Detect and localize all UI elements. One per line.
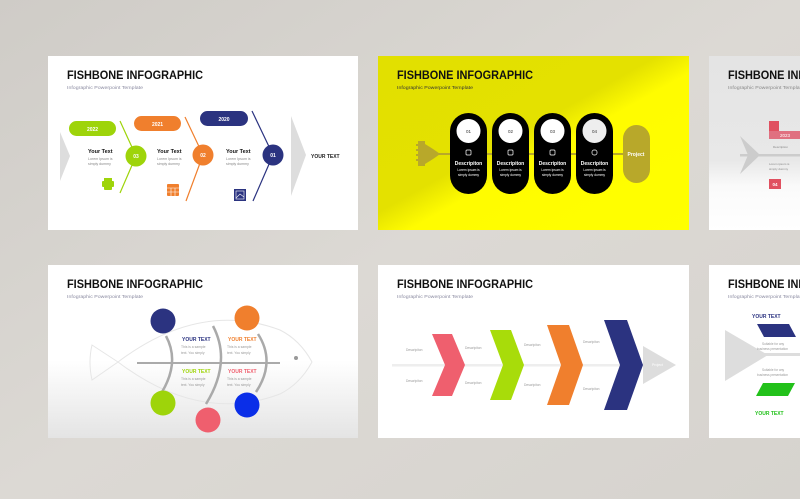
chevron navy (604, 320, 643, 410)
text navy (181, 337, 211, 355)
pill: project: Project (628, 152, 645, 158)
panel: slide 1 timeline fishbone (48, 56, 358, 230)
pill 02 (492, 113, 529, 194)
text block 2: simply dummy (157, 162, 180, 166)
descriptions: Descripiton (524, 343, 541, 347)
subtitle: Infographic Powerpoint Template (397, 85, 474, 90)
text block 3: simply dummy (226, 162, 249, 166)
arrow: left tail (60, 132, 70, 181)
text orange: This is a sample (227, 345, 252, 349)
item navy: Suitable for any (762, 342, 785, 346)
circle orange (234, 306, 260, 330)
chevron pink (432, 334, 465, 396)
panel: slide 2 yellow pills (378, 56, 689, 230)
bone orange (185, 117, 214, 201)
label: your text: YOUR TEXT (311, 154, 340, 160)
text navy: This is a sample (181, 345, 206, 349)
title: FISHBONE INFOGRAPHIC (67, 277, 203, 291)
text red: YOUR TEXT (228, 369, 257, 375)
pill 03: 03 (550, 129, 555, 134)
fish outline (90, 320, 312, 404)
text navy: YOUR TEXT (182, 337, 211, 343)
panel: slide 3 partial (709, 56, 800, 230)
subtitle: Infographic Powerpoint Template (397, 294, 474, 299)
bone green: 03 (133, 154, 139, 160)
pill 03: Lorem ipsum is (541, 168, 564, 172)
pill 03 (534, 113, 571, 194)
pill 01 (450, 113, 487, 194)
pill 01: simply dummy (458, 173, 479, 177)
text block 1: Your Text (88, 149, 113, 155)
item green (755, 368, 795, 417)
item green: YOUR TEXT (755, 411, 784, 417)
icon: printer (102, 178, 114, 190)
subtitle: Infographic Powerpoint Template (728, 294, 800, 299)
descriptions: Descripiton (406, 379, 423, 383)
pill 04: 04 (592, 129, 597, 134)
pill 03: Descripiton (539, 161, 566, 167)
pill 2021 (134, 116, 181, 131)
text block 2 (157, 149, 182, 166)
text block 3: Lorem Ipsum is (226, 157, 251, 161)
descriptions: Descripiton (465, 381, 482, 385)
item 04: 04 (772, 182, 778, 187)
spine: Project (652, 363, 663, 367)
bone navy (252, 111, 284, 201)
title: FISHBONE INFOGRAPHIC (397, 277, 533, 291)
descriptions: Descripiton (524, 383, 541, 387)
pill 2022 (69, 121, 116, 136)
pill 01: Lorem ipsum is (457, 168, 480, 172)
pill 02: Descripiton (497, 161, 524, 167)
circle red (196, 408, 220, 432)
text red: This is a sample (227, 377, 252, 381)
text orange: YOUR TEXT (228, 337, 257, 343)
text red: text. You simply (227, 383, 251, 387)
pill 02: 02 (508, 129, 513, 134)
item green: business presentation (757, 373, 788, 377)
pill 04: Lorem ipsum is (583, 168, 606, 172)
item 2023: Description (773, 145, 788, 149)
pill 2021: 2021 (152, 122, 163, 128)
text green: YOUR TEXT (182, 369, 211, 375)
descriptions: Descripiton (583, 340, 600, 344)
pill 04: simply dummy (584, 173, 605, 177)
text block 1 (88, 149, 113, 166)
text orange: text. You simply (227, 351, 251, 355)
text green: This is a sample (181, 377, 206, 381)
subtitle: Infographic Powerpoint Template (728, 85, 800, 90)
pill 01: 01 (466, 129, 471, 134)
item 04 (769, 162, 790, 189)
circle green (150, 390, 176, 416)
chevron orange (547, 325, 583, 405)
pill 02: simply dummy (500, 173, 521, 177)
text red (227, 369, 257, 387)
arrow: big head (291, 116, 306, 196)
pill 2020 (200, 111, 248, 126)
item 2023: 2023 (780, 133, 791, 138)
text block 1: Lorem Ipsum is (88, 157, 113, 161)
item navy: YOUR TEXT (752, 314, 781, 320)
item green: Suitable for any (762, 368, 785, 372)
text green: text. You simply (181, 383, 205, 387)
pill 01: Descripiton (455, 161, 482, 167)
text block 2: Lorem Ipsum is (157, 157, 182, 161)
text green (181, 369, 211, 387)
descriptions: Descripiton (406, 348, 423, 352)
panel: slide 6 partial (709, 265, 800, 438)
text orange (227, 337, 257, 355)
text navy: text. You simply (181, 351, 205, 355)
text block 2: Your Text (157, 149, 182, 155)
item navy (752, 314, 796, 351)
bone navy: 01 (270, 153, 276, 159)
title: FISHBONE INFOGRAPHIC (397, 68, 533, 82)
circle blue (234, 392, 260, 418)
subtitle: Infographic Powerpoint Template (67, 294, 144, 299)
circle navy (150, 308, 176, 334)
pill 02: Lorem ipsum is (499, 168, 522, 172)
pill 2022: 2022 (87, 127, 98, 133)
pill 04: Descripiton (581, 161, 608, 167)
pill 04 (576, 113, 613, 194)
text block 3 (226, 149, 251, 166)
subtitle: Infographic Powerpoint Template (67, 85, 144, 90)
pill 03: simply dummy (542, 173, 563, 177)
icon: chart (234, 189, 246, 201)
descriptions (406, 340, 600, 391)
icon: comb tail (416, 141, 628, 166)
item 04: Lorem ipsum is (769, 162, 790, 166)
bone orange: 02 (200, 153, 206, 159)
icon: calendar (167, 184, 179, 196)
item navy: business presentation (757, 347, 788, 351)
text block 1: simply dummy (88, 162, 111, 166)
panel: slide 4 fish (48, 265, 358, 438)
item 2023 (769, 121, 800, 149)
spine (137, 326, 298, 404)
arrow: fish head (740, 136, 760, 174)
descriptions: Descripiton (583, 387, 600, 391)
spine (392, 346, 676, 384)
pill 2020: 2020 (218, 117, 230, 123)
bone green (120, 121, 146, 193)
title: FISHBONE INFOGRAPHIC (67, 68, 203, 82)
text block 3: Your Text (226, 149, 251, 155)
descriptions: Descripiton (465, 346, 482, 350)
chevron green (490, 330, 524, 400)
panel: slide 5 chevrons (378, 265, 689, 438)
arrow: gray head (725, 330, 800, 381)
item 04: simply dummy (769, 167, 789, 171)
pill: project (623, 125, 650, 183)
